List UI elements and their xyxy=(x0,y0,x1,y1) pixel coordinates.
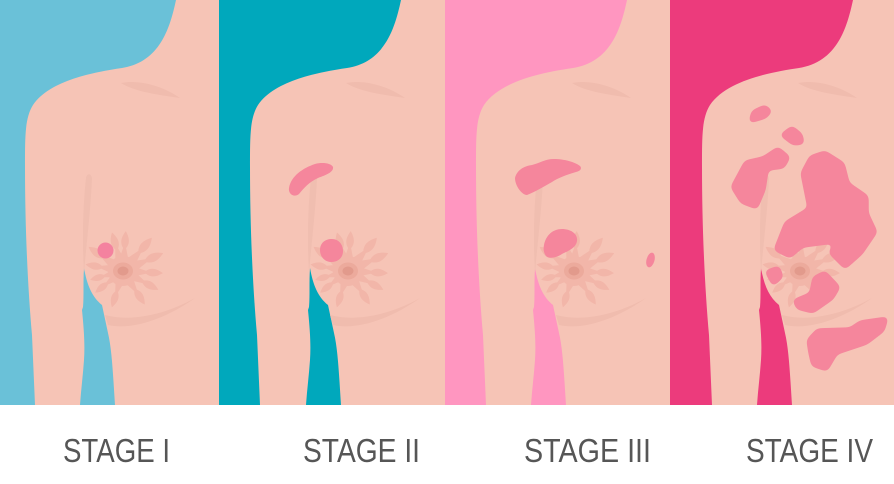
label: stage I: STAGE I xyxy=(63,432,170,469)
panel: stage I xyxy=(0,0,221,405)
tumours: stage IV spread xyxy=(731,105,888,371)
panel: stage III xyxy=(445,0,672,405)
tumour: stage III lump xyxy=(544,229,577,258)
tumour: stage II lump xyxy=(320,239,343,262)
panel: stage IV xyxy=(670,0,894,405)
tumour: stage I lump xyxy=(98,242,114,258)
tumour: stage III distant spot xyxy=(645,252,656,268)
tumour: stage III armpit mass xyxy=(515,159,581,195)
panel: stage II xyxy=(219,0,446,405)
label: stage III: STAGE III xyxy=(524,432,651,469)
label: stage II: STAGE II xyxy=(303,432,420,469)
label: stage IV: STAGE IV xyxy=(746,432,873,469)
tumour: stage II armpit node xyxy=(289,163,333,196)
